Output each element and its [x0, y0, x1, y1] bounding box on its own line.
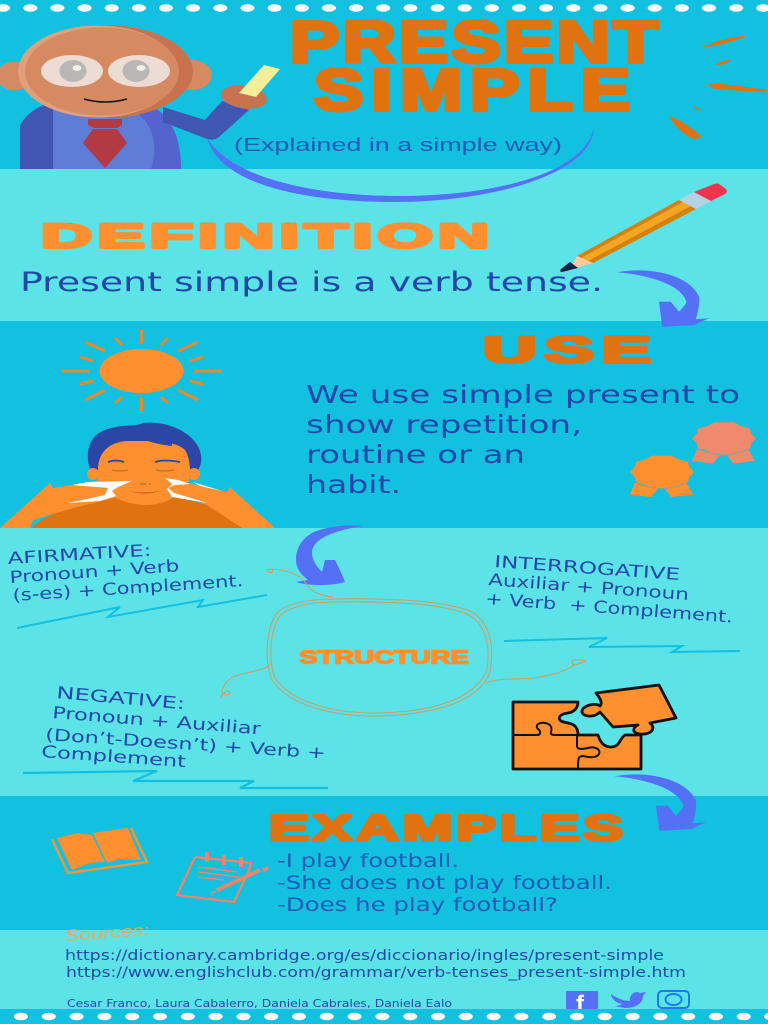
title: SIMPLE — [314, 58, 630, 123]
negative text: Pronoun + Auxiliar — [52, 703, 262, 738]
heading: definition: DEFINITION — [41, 216, 489, 255]
icon: sun — [62, 330, 222, 412]
afirmative text — [7, 541, 244, 605]
interrogative text: INTERROGATIVE — [494, 552, 681, 584]
icon: twitter — [611, 992, 646, 1008]
bottom band — [0, 1009, 768, 1024]
negative text — [41, 683, 326, 771]
subtitle: (Explained in a simple way) — [234, 135, 562, 155]
heading: use: USE — [483, 330, 651, 371]
icon: orange accent strokes — [670, 36, 767, 139]
underline: interrogative — [504, 638, 740, 652]
definition text: Present simple is a verb tense. — [20, 267, 603, 298]
arrow: use to structure — [296, 525, 363, 585]
afirmative text: Pronoun + Verb — [9, 556, 180, 587]
interrogative text: + Verb + Complement. — [485, 589, 733, 627]
negative text: NEGATIVE: — [56, 683, 186, 713]
source links: https://www.englishclub.com/grammar/verb-tenses_present-simple.htm — [66, 965, 686, 981]
authors: Cesar Franco, Laura Cabalerro, Daniela Cabrales, Daniela Ealo — [67, 997, 452, 1010]
negative text: (Don’t-Doesn’t) + Verb + — [45, 725, 326, 763]
panel: sources background — [0, 930, 768, 1009]
sources heading: Sources: — [64, 922, 150, 945]
icon: pencil — [560, 184, 727, 272]
icon: badge coral — [692, 422, 756, 464]
source links: https://dictionary.cambridge.org/es/diccionario/ingles/present-simple — [65, 948, 664, 964]
interrogative text — [485, 552, 733, 627]
icon: open book — [52, 828, 147, 873]
bottom dotted border — [14, 1013, 768, 1020]
icon: instagram — [658, 991, 689, 1008]
use text: routine or an — [306, 440, 525, 469]
afirmative text: AFIRMATIVE: — [7, 541, 152, 568]
examples text: -I play football. — [277, 850, 459, 872]
arrow: structure to examples — [614, 774, 706, 831]
panel: definition background — [0, 169, 768, 321]
icon: facebook — [566, 991, 598, 1018]
negative text: Complement — [41, 742, 187, 771]
underline: negative — [23, 771, 328, 788]
examples text — [277, 850, 612, 916]
examples text: -Does he play football? — [277, 894, 558, 916]
afirmative text: (s-es) + Complement. — [12, 571, 244, 605]
heading: examples: EXAMPLES — [269, 809, 623, 849]
use text: show repetition, — [306, 410, 582, 439]
interrogative text: Auxiliar + Pronoun — [488, 570, 690, 604]
title: PRESENT — [290, 10, 658, 75]
icon: teacher character — [0, 25, 280, 169]
title — [290, 10, 658, 123]
structure diagram outline — [220, 569, 586, 716]
decorative blue arc under title — [207, 127, 594, 202]
use text — [306, 380, 740, 499]
icon: badge orange — [630, 456, 694, 497]
examples text: -She does not play football. — [277, 872, 612, 894]
icon: man washing face — [0, 423, 275, 528]
icon: notepad and pen — [177, 852, 268, 902]
use text: We use simple present to — [306, 380, 740, 409]
icon: puzzle — [513, 685, 676, 769]
top dotted border — [0, 4, 768, 12]
underline: afirmative — [17, 595, 267, 628]
use text: habit. — [306, 470, 401, 499]
icon: facebook: f — [576, 991, 585, 1018]
arrow: definition to use — [617, 270, 709, 327]
source links — [65, 948, 686, 981]
panel: structure background — [0, 528, 768, 796]
heading: structure: STRUCTURE — [299, 647, 469, 667]
